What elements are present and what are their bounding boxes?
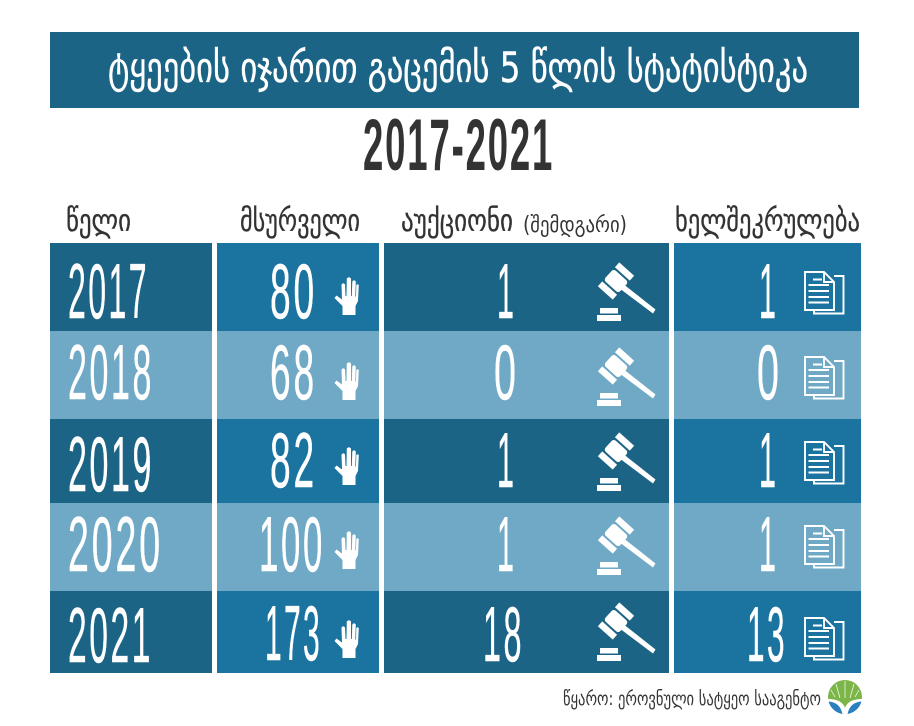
row 2019: 1 xyxy=(497,416,514,504)
row 2021: 173 xyxy=(265,589,322,677)
row 2017: 1 xyxy=(497,247,514,335)
period heading: 2017-2021 xyxy=(363,105,554,186)
column header: auction held: (შემდგარი) xyxy=(523,213,627,238)
row 2020: 1 xyxy=(759,500,776,588)
row 2017: 80 xyxy=(270,247,317,335)
icon: gavel xyxy=(597,347,656,406)
icon: logo xyxy=(828,680,862,714)
column header: auction held: აუქციონი xyxy=(401,203,513,239)
icon: gavel xyxy=(597,516,656,575)
row 2018: 68 xyxy=(270,328,317,416)
icon: hand xyxy=(334,620,359,658)
title banner xyxy=(50,32,859,108)
row 2019: 1 xyxy=(759,416,776,504)
icon: documents xyxy=(805,526,844,568)
row 2021: 18 xyxy=(483,590,524,678)
row 2018: 2018 xyxy=(68,328,154,416)
icon: gavel xyxy=(597,262,656,321)
column header: contract: ხელშეკრულება xyxy=(675,203,860,239)
icon: hand xyxy=(334,531,359,569)
icon: hand xyxy=(334,362,359,400)
icon: documents xyxy=(805,618,844,660)
icon: documents xyxy=(805,272,844,314)
row 2021: 2021 xyxy=(68,591,153,679)
row 2017: 1 xyxy=(759,247,776,335)
row 2021 xyxy=(50,589,861,679)
row 2020 xyxy=(50,500,861,591)
row 2018 xyxy=(50,328,861,419)
row 2018: 0 xyxy=(494,328,516,416)
row 2020: 1 xyxy=(497,500,514,588)
column header: auction held xyxy=(401,203,627,239)
icon: gavel xyxy=(597,432,656,491)
row 2017 xyxy=(50,243,861,335)
icon: documents xyxy=(805,357,844,398)
row 2021: 13 xyxy=(747,590,787,678)
row 2020: 2020 xyxy=(68,500,163,588)
row 2020: 100 xyxy=(259,500,325,588)
row 2019: 2019 xyxy=(68,420,154,508)
column header: year: წელი xyxy=(66,203,131,239)
icon: documents xyxy=(805,442,844,484)
icon: gavel xyxy=(597,602,656,661)
source note: წყარო: ეროვნული სატყეო სააგენტო xyxy=(563,688,821,710)
row 2018: 0 xyxy=(757,328,779,416)
row 2019: 82 xyxy=(270,416,317,504)
row 2017: 2017 xyxy=(68,247,149,335)
icon: hand xyxy=(334,447,359,485)
row 2019 xyxy=(50,416,861,508)
column header: applicants: მსურველი xyxy=(240,203,360,239)
icon: hand xyxy=(334,277,359,315)
